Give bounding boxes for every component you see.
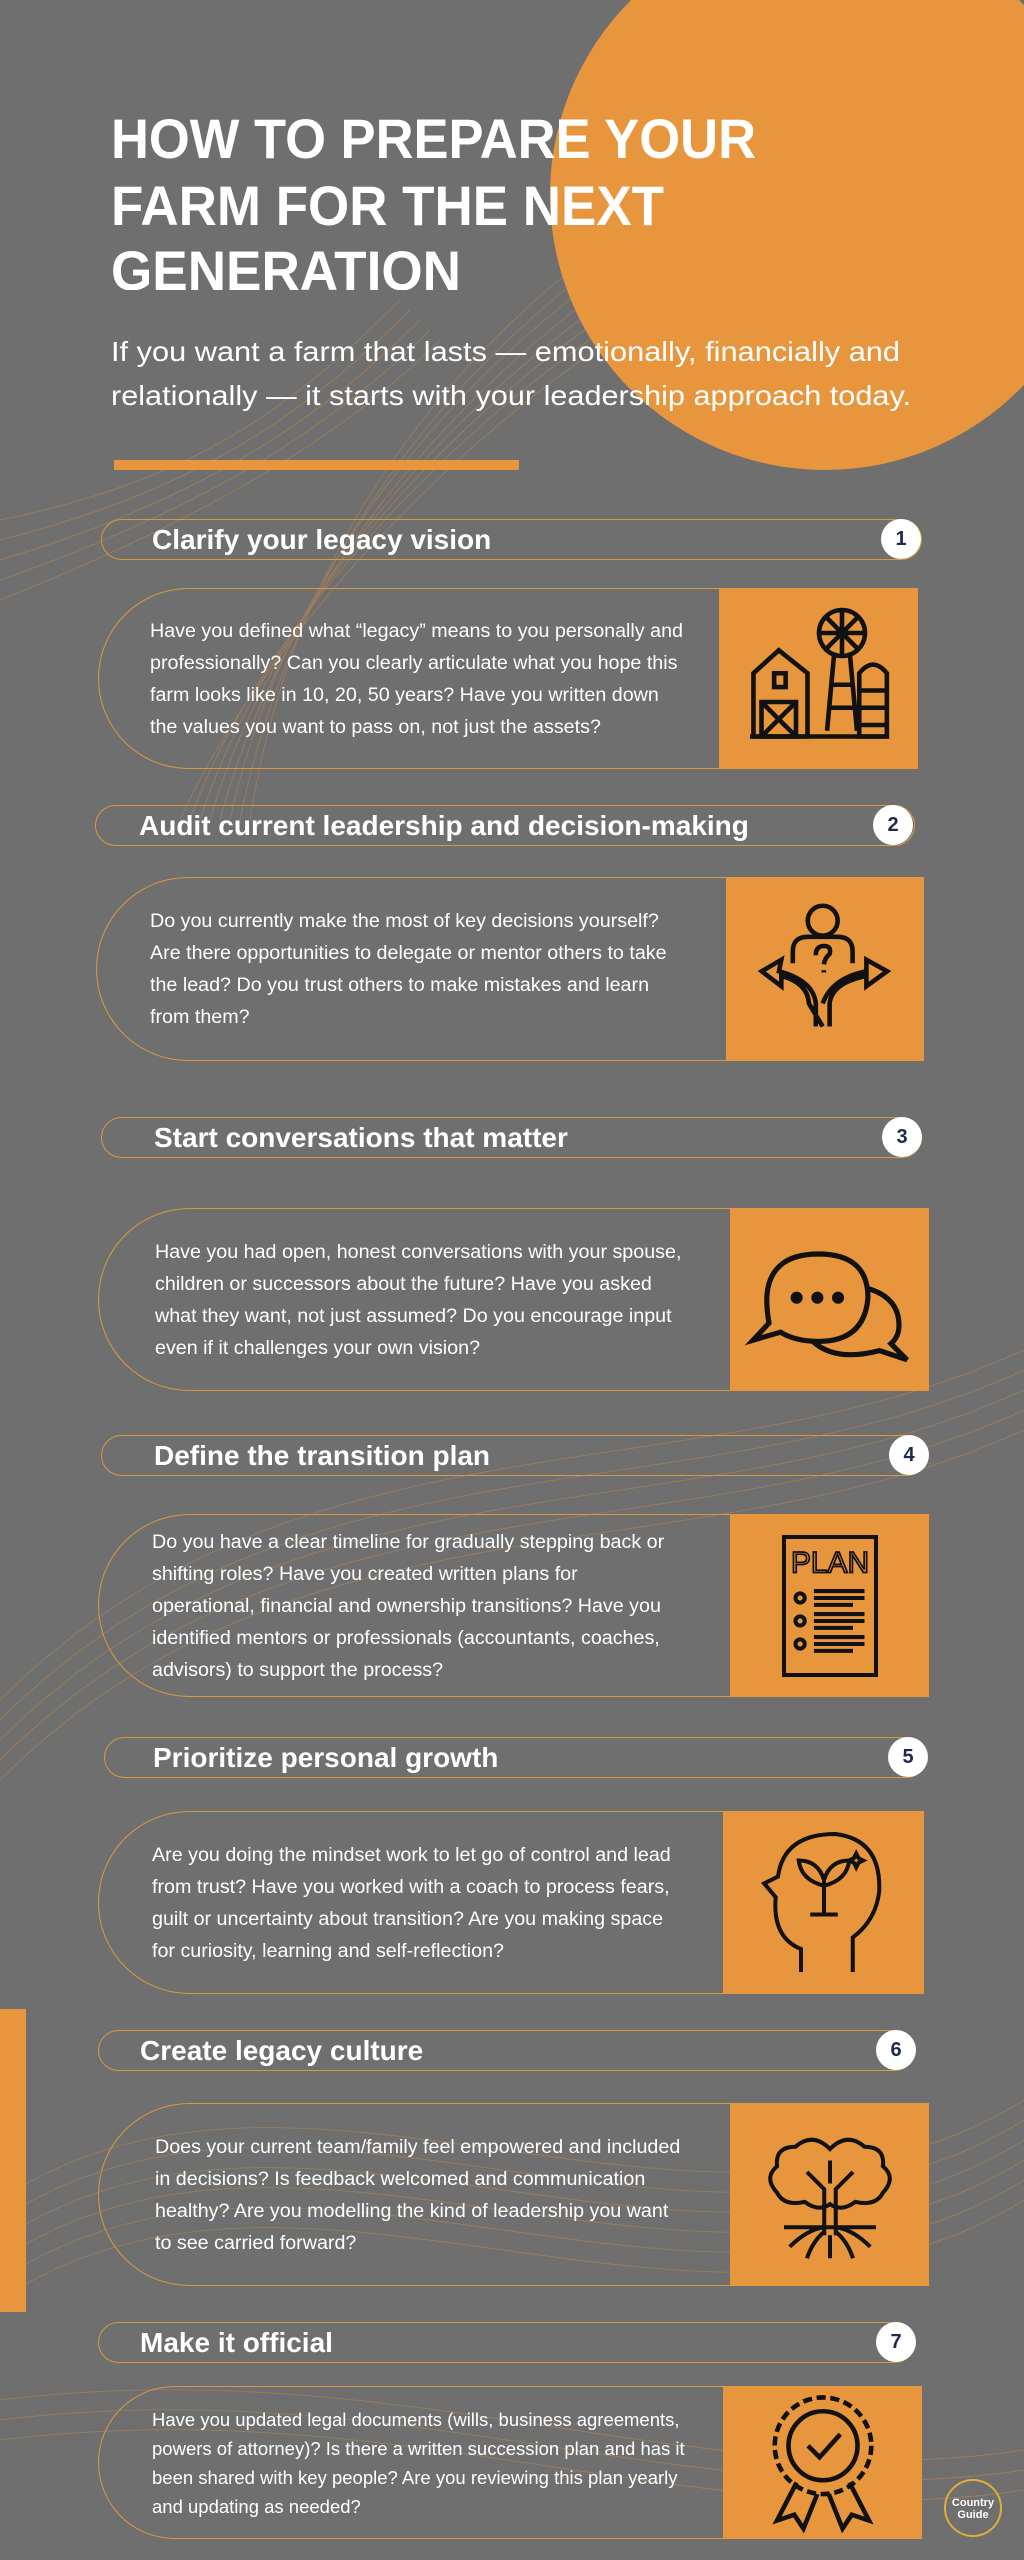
text 4: Do you have a clear timeline for gradually stepping back or [152, 1530, 664, 1552]
header 7: 7 [890, 2331, 902, 2353]
text 6: in decisions? Is feedback welcomed and communication [155, 2168, 645, 2190]
text 3: even if it challenges your own vision? [155, 1336, 480, 1358]
text 1 [150, 620, 683, 738]
header 5: Prioritize personal growth [153, 1742, 498, 1773]
icon: speech bubbles [730, 1208, 929, 1391]
box 2 [96, 877, 746, 1061]
text 4: operational, financial and ownership transitions? Have you [152, 1594, 661, 1616]
text 6 [155, 2136, 680, 2254]
text 2: Do you currently make the most of key decisions yourself? [150, 910, 659, 932]
icon: barn and windmill [719, 588, 918, 769]
text 4: shifting roles? Have you created written plans for [152, 1562, 578, 1584]
header 6: 6 [890, 2039, 902, 2061]
icon: award badge [723, 2386, 922, 2539]
title: HOW TO PREPARE YOUR [111, 107, 756, 170]
box 3 [98, 1208, 748, 1391]
text 4: identified mentors or professionals (accountants, coaches, [152, 1626, 660, 1648]
text 3: what they want, not just assumed? Do you encourage input [155, 1304, 672, 1326]
text 1: farm looks like in 10, 20, 50 years? Have you written down [150, 684, 659, 706]
orange circle decoration [550, 0, 1024, 470]
text 6: to see carried forward? [155, 2232, 356, 2254]
text 5: from trust? Have you worked with a coach to process fears, [152, 1876, 670, 1898]
section 2 [95, 805, 924, 1061]
text 3: children or successors about the future? Have you asked [155, 1272, 652, 1294]
section 7 [98, 2322, 922, 2539]
header 3 [101, 1117, 922, 1158]
logo: Country Guide: Guide [957, 2509, 989, 2521]
text 5 [152, 1844, 671, 1962]
header 2 [95, 805, 915, 846]
text 2 [150, 910, 667, 1028]
text 5: guilt or uncertainty about transition? Are you making space [152, 1908, 663, 1930]
left orange accent bar [0, 2009, 26, 2312]
text 7: powers of attorney)? Is there a written succession plan and has it [152, 2438, 685, 2458]
box 5 [98, 1811, 743, 1994]
logo: Country Guide [944, 2479, 1002, 2537]
header 2: Audit current leadership and decision-making [139, 810, 749, 841]
header 4: Define the transition plan [154, 1440, 490, 1471]
box 7 [98, 2386, 743, 2539]
text 3: Have you had open, honest conversations with your spouse, [155, 1240, 681, 1262]
text 5: Are you doing the mindset work to let go of control and lead [152, 1844, 671, 1866]
title [111, 107, 756, 290]
text 7 [152, 2408, 685, 2517]
subtitle [111, 336, 911, 411]
orange underline bar [114, 460, 519, 470]
text 6: Does your current team/family feel empowered and included [155, 2136, 680, 2158]
box 4 [98, 1514, 748, 1697]
header 1: 1 [895, 528, 907, 550]
header 4: 4 [903, 1444, 915, 1466]
subtitle: relationally — it starts with your leadership approach today. [111, 380, 911, 411]
title: FARM FOR THE NEXT [111, 174, 664, 237]
header 5 [104, 1737, 927, 1778]
subtitle: If you want a farm that lasts — emotionally, financially and [111, 336, 900, 367]
icon: head with plant [723, 1811, 924, 1994]
header 3: 3 [896, 1126, 908, 1148]
section 1 [98, 519, 922, 769]
header 5: 5 [902, 1746, 914, 1768]
text 2: from them? [150, 1006, 250, 1028]
text 7: Have you updated legal documents (wills, business agreements, [152, 2408, 680, 2430]
section 5 [98, 1737, 928, 1994]
text 2: the lead? Do you trust others to make mistakes and learn [150, 974, 649, 996]
header 2: 2 [887, 814, 899, 836]
text 4 [152, 1530, 664, 1680]
header 7 [98, 2322, 915, 2363]
icon: tree with roots [730, 2103, 929, 2286]
text 5: for curiosity, learning and self-reflection? [152, 1940, 504, 1962]
text 1: the values you want to pass on, not just the assets? [150, 716, 601, 738]
text 4: advisors) to support the process? [152, 1658, 443, 1680]
logo: Country Guide: Country [952, 2497, 994, 2509]
icon: person at crossroads [726, 877, 924, 1061]
header 1 [101, 519, 922, 560]
box 1 [98, 588, 738, 769]
text 7: been shared with key people? Are you reviewing this plan yearly [152, 2466, 678, 2488]
text 7: and updating as needed? [152, 2496, 361, 2516]
icon: plan document [730, 1514, 929, 1697]
section 3 [98, 1117, 929, 1391]
header 3: Start conversations that matter [154, 1122, 568, 1153]
header 4 [101, 1435, 927, 1476]
header 7: Make it official [140, 2327, 333, 2358]
header 1: Clarify your legacy vision [152, 524, 491, 555]
text 2: Are there opportunities to delegate or mentor others to take [150, 942, 667, 964]
text 3 [155, 1240, 681, 1358]
text 1: Have you defined what “legacy” means to you personally and [150, 620, 683, 642]
header 6 [98, 2030, 915, 2071]
box 6 [98, 2103, 748, 2286]
text 6: healthy? Are you modelling the kind of leadership you want [155, 2200, 668, 2222]
text 1: professionally? Can you clearly articulate what you hope this [150, 652, 677, 674]
section 6 [98, 2030, 929, 2286]
icon: plan document: PLAN [790, 1546, 869, 1579]
header 6: Create legacy culture [140, 2035, 423, 2066]
section 4 [98, 1435, 929, 1697]
